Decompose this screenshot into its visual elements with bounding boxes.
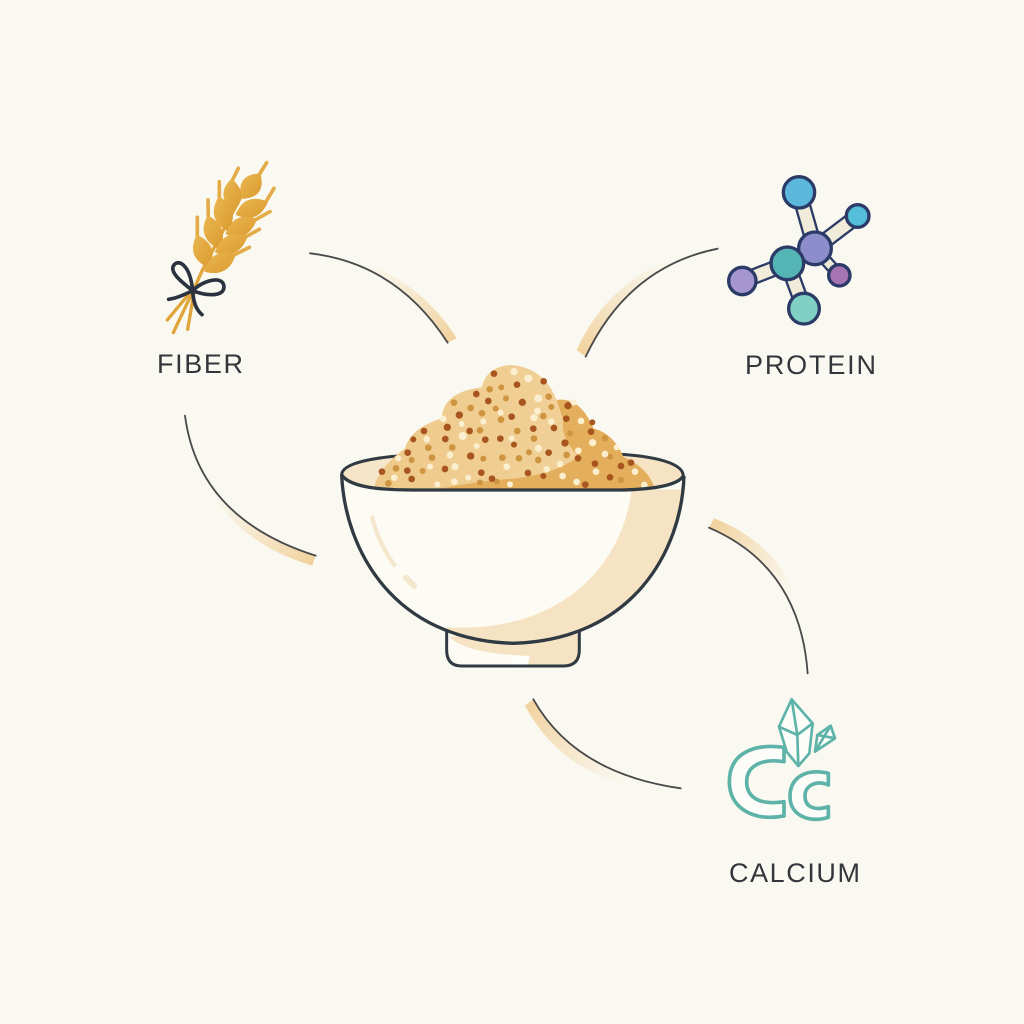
molecule bonds: [742, 192, 858, 309]
wheat awns: [197, 163, 274, 255]
arc: fiber from bowl: [185, 416, 316, 566]
icon: wheat with bow: [167, 163, 274, 333]
molecule atoms: [729, 177, 869, 324]
light grains: [391, 368, 647, 488]
bowl interior: [342, 454, 683, 490]
big letter C: [729, 746, 784, 817]
arc: calcium to bowl: [525, 699, 681, 788]
arc: protein to bowl: [577, 249, 718, 357]
grain mound: [373, 365, 655, 492]
foot highlight: [512, 657, 528, 664]
bow: [169, 263, 224, 315]
small crystal: [815, 726, 835, 752]
mound shadow: [442, 400, 654, 488]
icon: protein molecule: [729, 177, 869, 324]
mid grains: [385, 385, 624, 486]
label: calcium: CALCIUM: [729, 858, 860, 888]
arc: fiber to bowl: [310, 253, 457, 343]
dark grains: [379, 371, 634, 488]
central bowl with grains: [342, 365, 687, 666]
bowl foot: [447, 632, 579, 666]
label: fiber: FIBER: [157, 349, 243, 379]
small letter c: [790, 772, 828, 819]
bowl body: [342, 475, 687, 650]
arc: bowl to calcium: [709, 518, 808, 673]
infographic canvas: [159, 160, 874, 882]
wheat stems: [167, 198, 240, 333]
icon: calcium symbol with crystals: [729, 699, 835, 819]
label: protein: PROTEIN: [745, 350, 876, 380]
large crystal: [779, 699, 813, 766]
wheat grains: [195, 175, 266, 272]
